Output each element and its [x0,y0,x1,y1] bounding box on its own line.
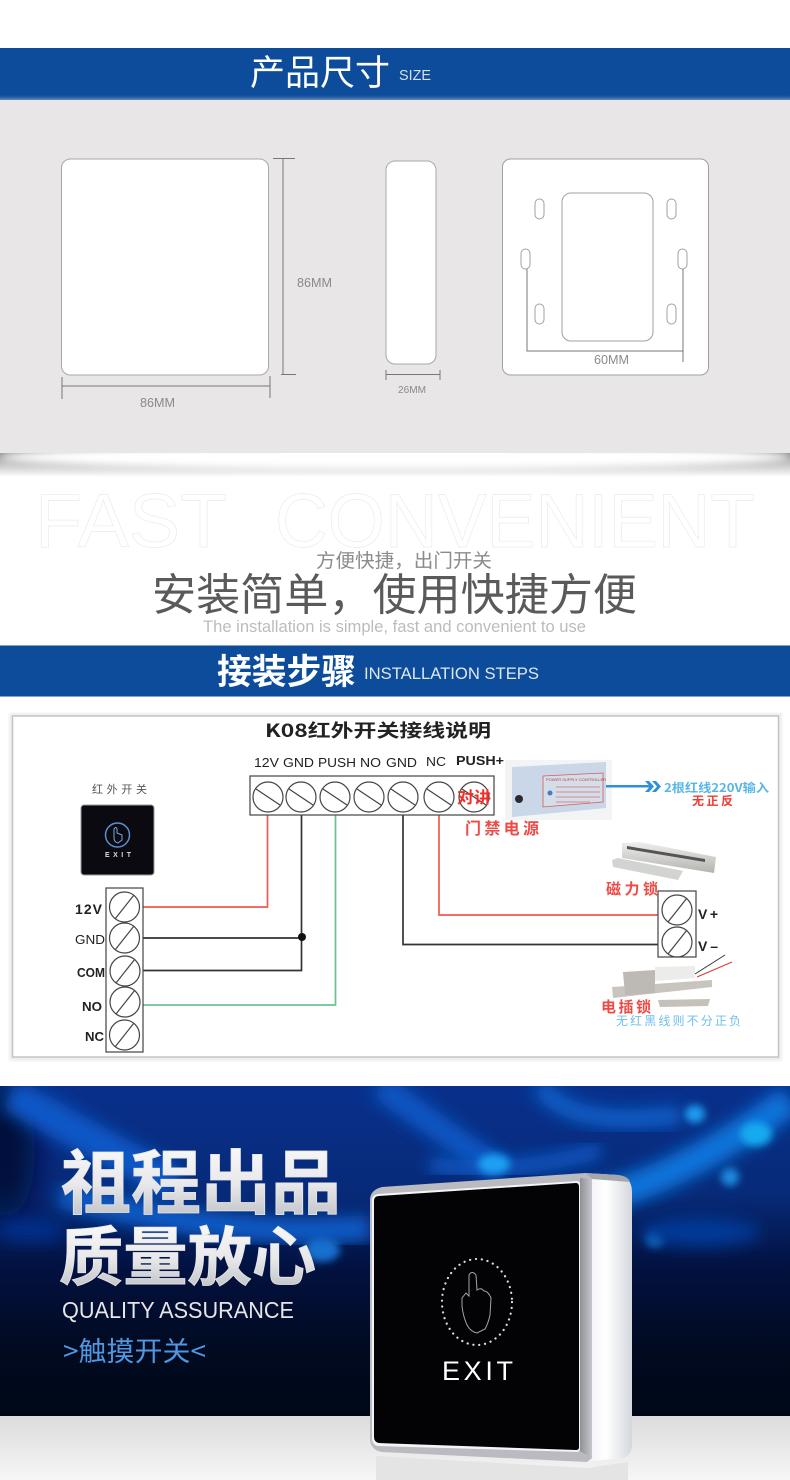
subtitle: QUALITY ASSURANCE [62,1297,294,1323]
section header: product size [0,45,790,100]
panel: quality banner [0,1080,790,1416]
front view with 86MM dimensions: 86MM [297,275,332,290]
terminal labels top: GND [283,755,314,770]
headline [59,1128,341,1299]
infrared switch label: 红外开关 [92,781,147,797]
terminal labels left: NO [82,999,102,1014]
magnetic lock [612,842,716,880]
back view with mounting holes and 60MM dimension [502,159,708,375]
front view with 86MM dimensions: 86MM [140,395,175,410]
side view with 26MM dimension [386,161,440,396]
arrow: power input [606,781,661,792]
label: magnetic lock: 磁力锁 [606,878,658,899]
section shadow [0,444,790,477]
panel: dimensions [0,100,790,453]
label: power input note [664,779,769,809]
terminal block left [106,888,143,1052]
terminal labels right [698,906,718,954]
icon: small exit button [81,805,154,875]
bezel [370,1173,592,1462]
strike lock [612,955,732,1007]
label: strike lock: 电插锁 [601,996,651,1017]
icon: hand [462,1272,491,1333]
terminal labels left: GND [75,932,105,947]
terminal labels right: V– [698,938,718,954]
text block: install slogan: 安装简单，使用快捷方便 [152,559,637,623]
floor [0,1416,790,1480]
power supply box [505,760,612,820]
terminal labels top: NO [360,755,381,770]
wires [140,812,660,1005]
terminal labels right: V+ [698,906,718,922]
reflection [376,1456,628,1480]
watermark: FAST CONVENIENT: CONVENIENT [275,479,755,564]
section header: product size: 产品尺寸 [250,45,390,96]
label: access control power: 门禁电源 [465,815,539,839]
side top edge [585,1173,630,1182]
terminal labels top: PUSH [318,755,356,770]
side view with 26MM dimension: 26MM [398,385,426,396]
terminal labels top: GND [386,755,417,770]
headline: 祖程出品 [61,1128,341,1229]
terminal labels top: 12V [254,755,279,770]
EXIT label: EXIT [442,1356,513,1386]
terminal block top [250,776,494,815]
background light streaks [0,1086,790,1268]
chamfer [580,1178,592,1458]
device side [585,1173,632,1462]
device: touch exit button [370,1173,632,1480]
white rim [372,1181,580,1452]
terminal labels left: NC [85,1029,105,1044]
section header: installation steps: INSTALLATION STEPS [364,664,539,683]
watermark: FAST CONVENIENT [35,479,755,564]
label: intercom: 对讲 [457,784,491,808]
icon: small exit button: EXIT [105,852,132,859]
terminal labels top: NC [426,754,446,769]
section header: installation steps: 接装步骤 [217,644,356,695]
label: power input note: 2根红线220V输入 [664,779,769,796]
back view with mounting holes and 60MM dimension: 60MM [594,352,629,367]
black touch face [374,1183,579,1450]
section header: installation steps [0,644,790,697]
text block: install slogan: The installation is simple, fast and convenient to use [203,617,586,636]
headline: 质量放心 [59,1207,316,1299]
terminal labels left: COM [77,965,105,980]
watermark: FAST CONVENIENT: FAST [35,479,227,564]
terminal labels left [75,901,105,1044]
section header: product size: SIZE [399,67,431,84]
terminal labels left: 12V [75,901,103,917]
touch ring dots [442,1259,512,1345]
terminal labels top: PUSH+ [456,753,504,768]
terminal block right [658,891,696,957]
label: touch switch: >触摸开关< [63,1330,206,1369]
text block: install slogan: 方便快捷，出门开关 [316,546,492,573]
note: polarity: 无红黑线则不分正负 [616,1012,741,1029]
terminal labels top [254,753,504,770]
label: power input note: 无正反 [692,792,733,809]
panel: wiring diagram [9,713,782,1061]
front view with 86MM dimensions [62,158,332,410]
power supply box: POWER SUPPLY CONTROLLER [546,777,606,782]
wiring title: K08红外开关接线说明 [265,717,491,743]
